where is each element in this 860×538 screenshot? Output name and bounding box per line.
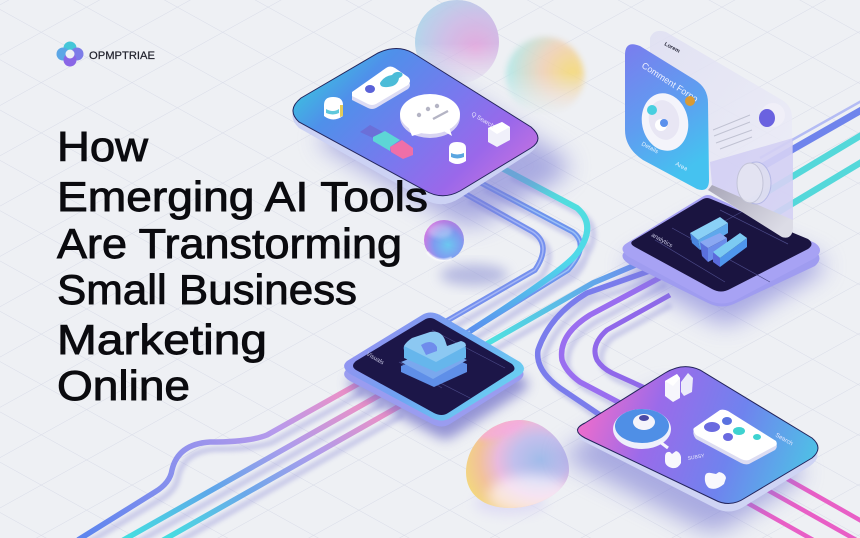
magnifier disc — [613, 409, 671, 449]
card gridlines — [399, 330, 505, 398]
amber dot — [685, 96, 695, 106]
white cube — [488, 122, 510, 147]
logo — [56, 42, 155, 66]
panel footer labels: Area — [674, 161, 689, 173]
wires: center to right dark card — [483, 263, 640, 346]
block icon — [665, 373, 693, 402]
wires: right dark card to lower card — [538, 269, 670, 415]
dark card caption: analytics — [650, 233, 673, 249]
speech bubble — [400, 94, 460, 138]
title: Marketing — [57, 316, 267, 363]
card caption: SUBSY — [687, 453, 706, 462]
title: Small Business — [57, 266, 357, 313]
wires: right edge — [740, 99, 860, 232]
title: Online — [57, 362, 190, 409]
card caption: Visuals — [365, 352, 385, 366]
dial control — [636, 89, 694, 155]
glyph token left — [665, 451, 681, 468]
title: Emerging AI Tools — [57, 173, 428, 220]
wire shadows — [86, 177, 671, 538]
decorative sphere: teal yellow — [506, 37, 584, 115]
panel: blue front panel — [625, 44, 709, 190]
card label: Search — [774, 433, 793, 447]
panel: center dark card — [344, 312, 528, 439]
wires: top card to dark card — [445, 166, 587, 334]
panel: glass back panel — [650, 31, 793, 238]
wires: lower left to dark card — [78, 380, 405, 538]
large pastel sphere — [466, 411, 572, 515]
panel heading: Comment Forno — [640, 60, 700, 104]
title: How — [57, 123, 149, 170]
wires: lower right pink — [735, 472, 860, 538]
chat pill widget — [352, 66, 410, 109]
cylinder left — [324, 97, 343, 120]
panel footer labels — [640, 141, 689, 173]
panel footer labels: Details — [640, 141, 659, 155]
title — [57, 123, 428, 409]
glyph token right — [705, 472, 726, 489]
brand name: OPMPTRIAE — [89, 50, 155, 62]
small cylinder — [449, 142, 466, 164]
card caption: Q Search — [470, 112, 495, 130]
decorative sphere: blue pink — [415, 0, 499, 84]
title: Are Transtorming — [57, 220, 402, 267]
panel: top app card — [292, 48, 568, 225]
small glossy sphere — [424, 220, 508, 286]
dark card gridlines — [655, 210, 788, 282]
stacked color blocks — [360, 125, 413, 159]
panel: lower right app card — [563, 367, 818, 532]
3d bar icon — [690, 217, 747, 267]
logo mark — [56, 42, 84, 66]
glass button — [759, 103, 785, 127]
glass coin — [737, 162, 771, 204]
3d logo block — [401, 332, 467, 387]
white remote widget — [693, 410, 777, 464]
glass text lines — [713, 115, 752, 149]
panel: right dark analytics card — [622, 195, 824, 324]
glass caption: Lorem — [663, 41, 681, 55]
